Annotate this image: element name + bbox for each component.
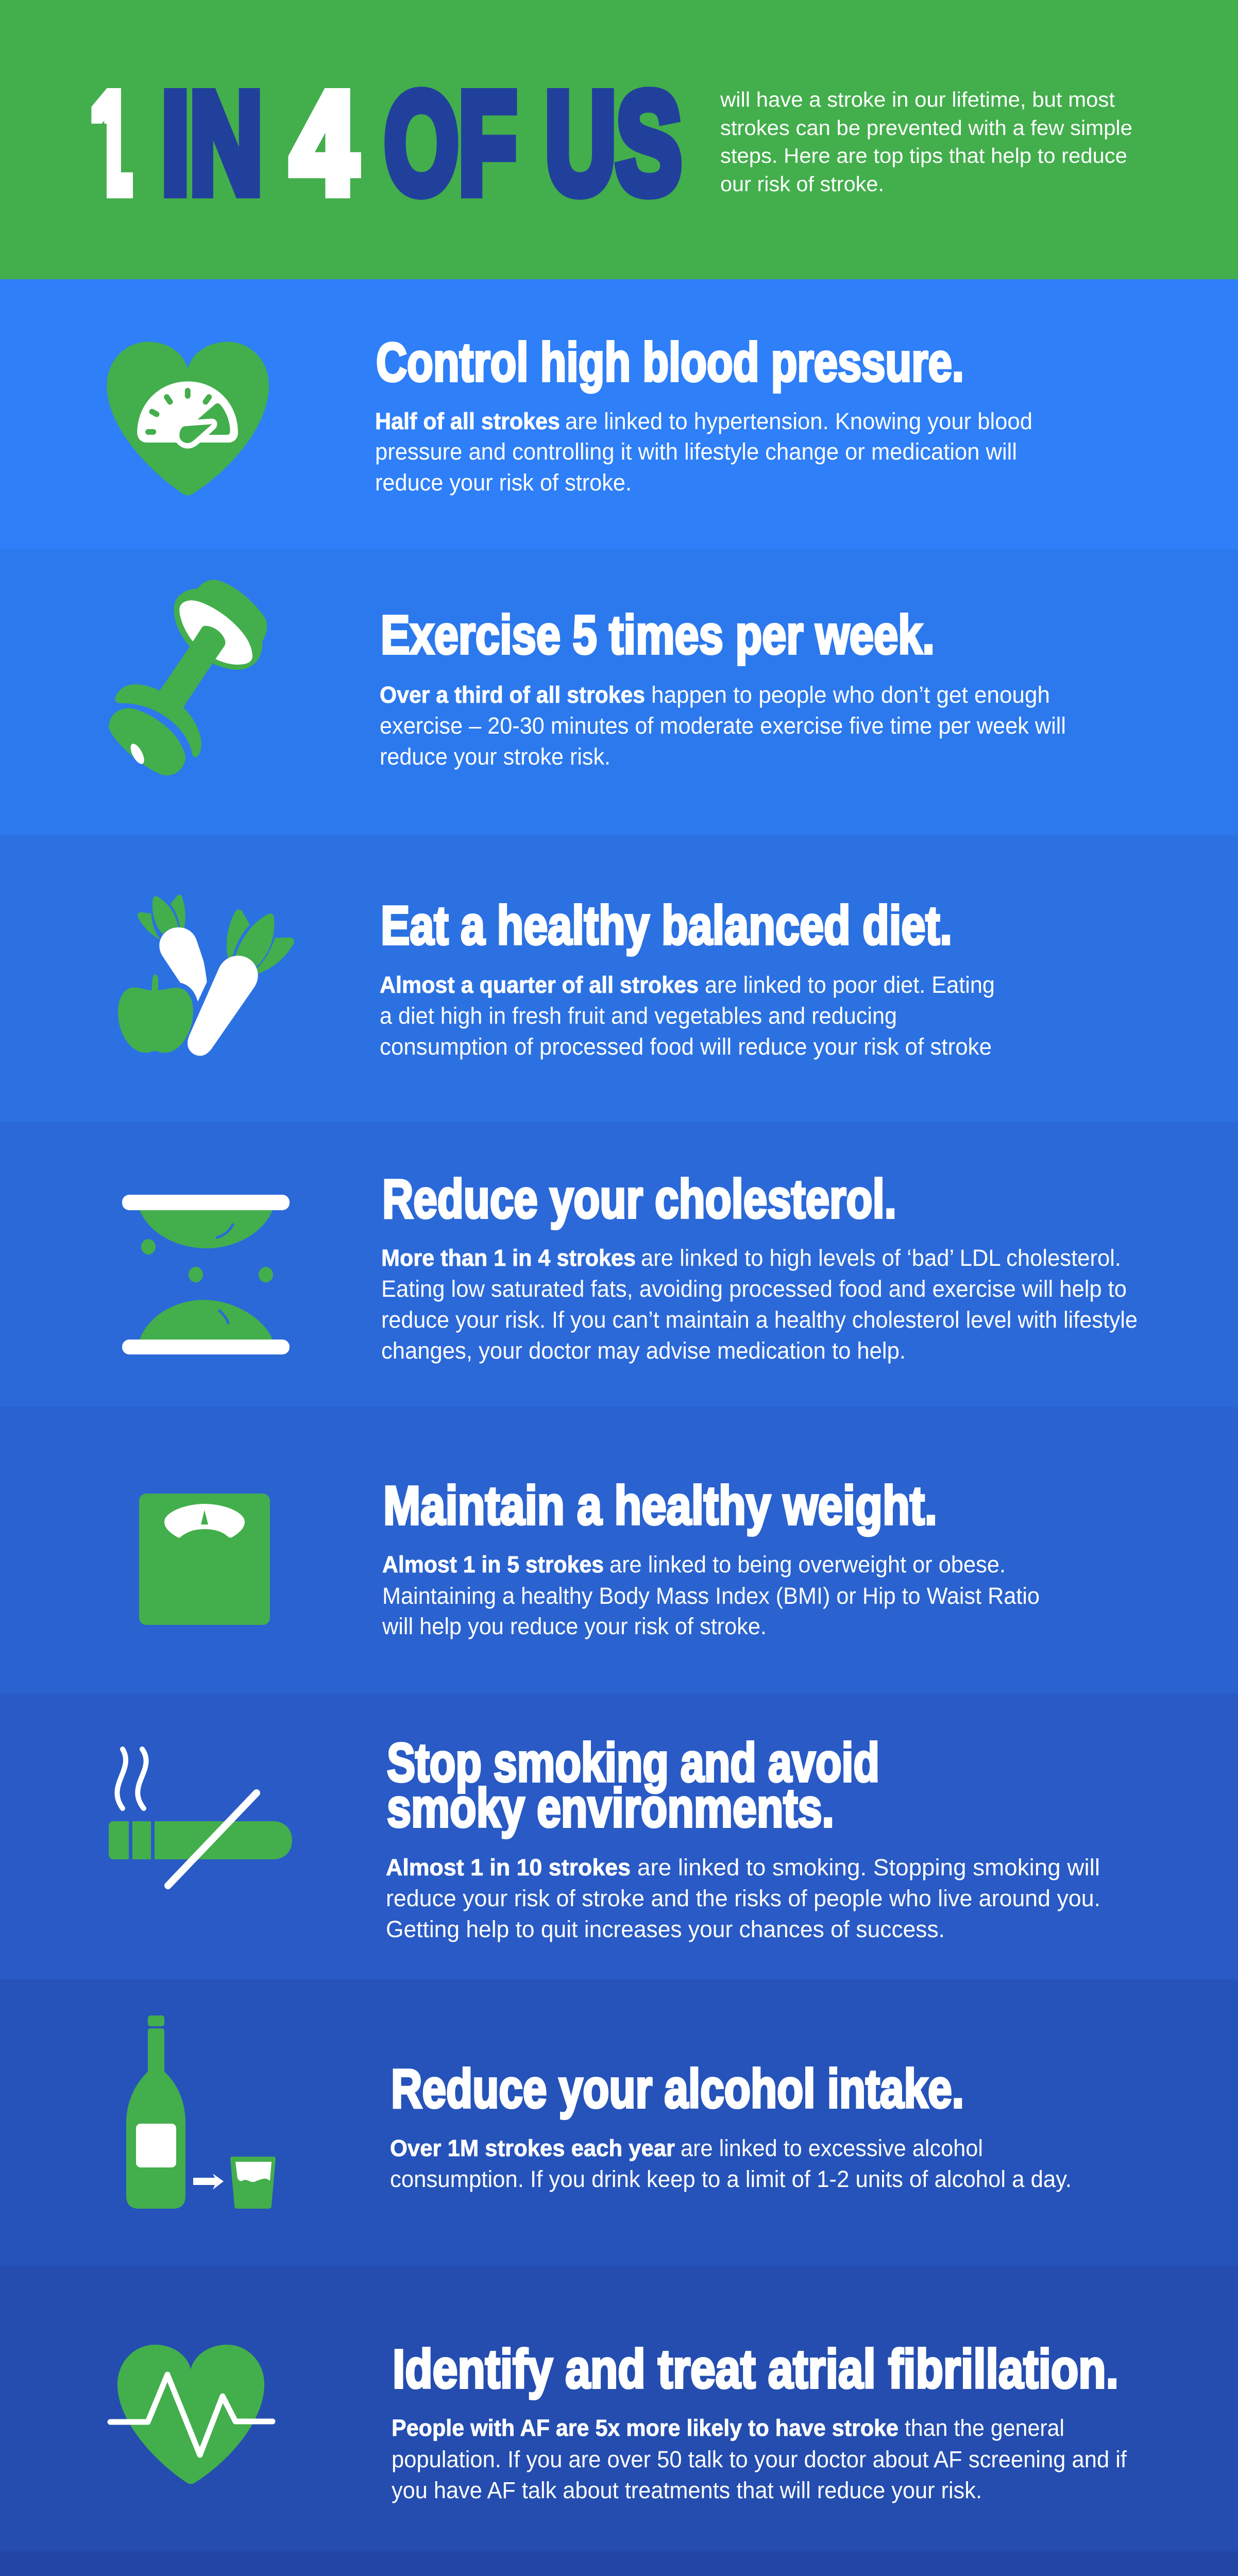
body text: Over a third of all strokes xyxy=(380,682,645,708)
body text: changes, your doctor may advise medication to help. xyxy=(381,1337,906,1364)
body text: reduce your risk of stroke. xyxy=(375,469,632,496)
icon: cholesterol hourglass xyxy=(122,1195,290,1354)
panel: cholesterol xyxy=(0,1122,1238,1407)
body text: reduce your risk of stroke and the risks of people who live around you. xyxy=(386,1885,1100,1911)
title: 1 in 4 of us: 1 xyxy=(89,63,132,224)
panel: exercise xyxy=(0,549,1238,835)
icon: bathroom scale xyxy=(139,1494,270,1625)
panel: diet xyxy=(0,835,1238,1122)
body text: More than 1 in 4 strokes xyxy=(381,1245,636,1271)
title: 1 in 4 of us: IN xyxy=(161,63,263,224)
heading: Stop smoking and avoid xyxy=(387,1732,879,1793)
body text: are linked to high levels of ‘bad’ LDL cholesterol. xyxy=(641,1245,1121,1271)
body text: Over 1M strokes each year xyxy=(390,2135,675,2161)
body text: consumption. If you drink keep to a limit of 1-2 units of alcohol a day. xyxy=(390,2166,1072,2192)
body text: Almost 1 in 5 strokes xyxy=(382,1551,604,1578)
heading: smoky environments. xyxy=(387,1777,834,1838)
panel: diabetes xyxy=(0,2551,1238,2576)
body text: pressure and controlling it with lifestyle change or medication will xyxy=(375,438,1017,465)
icon: crossed out cigarette xyxy=(109,1749,292,1886)
title: 1 in 4 of us: US xyxy=(545,63,682,224)
title: 1 in 4 of us: OF xyxy=(384,63,517,224)
body text xyxy=(380,682,1066,770)
header text block: steps. Here are top tips that help to reduce xyxy=(720,144,1127,167)
body text: exercise – 20-30 minutes of moderate exercise five time per week will xyxy=(380,713,1066,739)
body text: Half of all strokes xyxy=(375,408,560,434)
body text: reduce your risk. If you can’t maintain a healthy cholesterol level with lifestyle xyxy=(381,1307,1138,1333)
icon: heart with gauge xyxy=(107,342,269,496)
body text xyxy=(381,1245,1138,1364)
body text: are linked to being overweight or obese. xyxy=(609,1551,1006,1578)
body text xyxy=(380,972,995,1060)
header text block: will have a stroke in our lifetime, but most xyxy=(720,88,1115,111)
body text: are linked to poor diet. Eating xyxy=(705,972,995,998)
header text block: our risk of stroke. xyxy=(720,172,884,196)
body text xyxy=(382,1551,1040,1639)
heading xyxy=(387,1732,879,1838)
body text: a diet high in fresh fruit and vegetables and reducing xyxy=(380,1003,897,1029)
panel: weight xyxy=(0,1407,1238,1693)
body text: Eating low saturated fats, avoiding processed food and exercise will help to xyxy=(381,1276,1127,1302)
body text xyxy=(392,2415,1127,2503)
header text block xyxy=(720,88,1132,196)
body text: reduce your stroke risk. xyxy=(380,743,610,770)
panel: atrial fibrillation xyxy=(0,2266,1238,2551)
panel: smoking xyxy=(0,1693,1238,1979)
body text: are linked to excessive alcohol xyxy=(681,2135,983,2161)
body text: Almost a quarter of all strokes xyxy=(380,972,699,998)
icon: dumbbell xyxy=(109,580,267,775)
heading: Exercise 5 times per week. xyxy=(381,605,935,666)
body text: than the general xyxy=(905,2415,1064,2441)
title: 1 in 4 of us: 4 xyxy=(291,63,358,224)
body text: population. If you are over 50 talk to your doctor about AF screening and if xyxy=(392,2446,1127,2472)
body text: Maintaining a healthy Body Mass Index (BMI) or Hip to Waist Ratio xyxy=(382,1583,1040,1609)
heading: Maintain a healthy weight. xyxy=(383,1476,937,1536)
body text: Almost 1 in 10 strokes xyxy=(386,1854,631,1880)
body text: are linked to hypertension. Knowing your blood xyxy=(565,408,1032,434)
body text: happen to people who don’t get enough xyxy=(651,682,1050,708)
header text block: strokes can be prevented with a few simple xyxy=(720,116,1132,140)
body text: you have AF talk about treatments that will reduce your risk. xyxy=(392,2477,982,2503)
heading: Reduce your cholesterol. xyxy=(382,1168,896,1229)
panel: control high blood pressure xyxy=(0,279,1238,549)
heading: Eat a healthy balanced diet. xyxy=(381,895,952,956)
title: 1 in 4 of us xyxy=(77,63,682,224)
body text: People with AF are 5x more likely to have stroke xyxy=(392,2415,898,2441)
body text xyxy=(375,408,1032,496)
body text: are linked to smoking. Stopping smoking will xyxy=(637,1854,1100,1880)
panel: alcohol xyxy=(0,1979,1238,2266)
heading: Control high blood pressure. xyxy=(376,332,964,393)
panel: header xyxy=(0,0,1238,279)
icon: bottle and glass xyxy=(126,2015,276,2209)
body text: Getting help to quit increases your chances of success. xyxy=(386,1916,945,1942)
heading: Reduce your alcohol intake. xyxy=(391,2059,964,2120)
body text: will help you reduce your risk of stroke. xyxy=(382,1613,767,1639)
icon: heart with pulse xyxy=(110,2345,273,2484)
body text xyxy=(386,1854,1100,1942)
body text xyxy=(390,2135,1072,2192)
body text: consumption of processed food will reduce your risk of stroke xyxy=(380,1033,992,1060)
icon: carrots and apple xyxy=(118,895,294,1056)
